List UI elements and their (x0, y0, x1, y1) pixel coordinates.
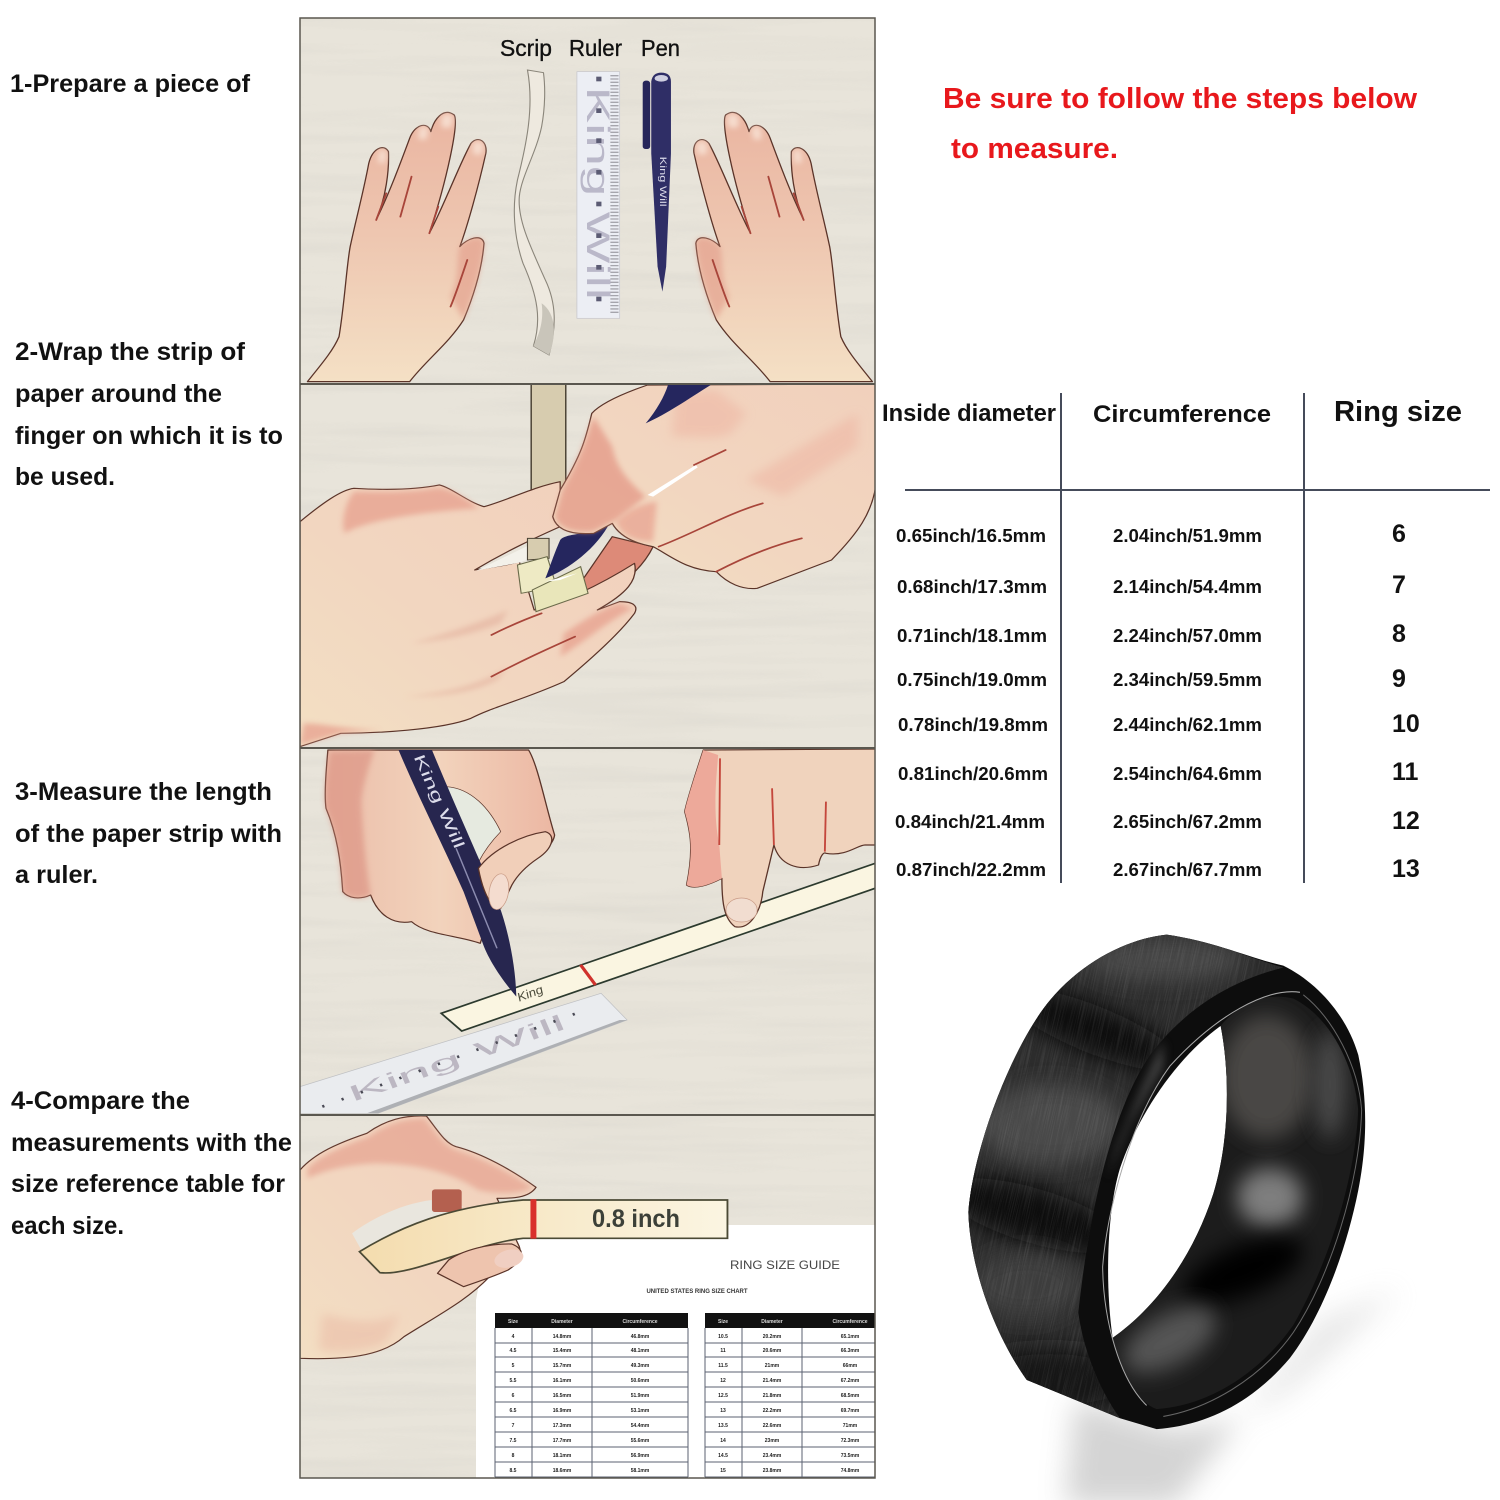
column: circumference: 2.14inch/54.4mm (1113, 577, 1262, 597)
size table right: 14 (720, 1438, 726, 1444)
size table left: 46.8mm (631, 1334, 650, 1340)
ruler (300, 993, 627, 1113)
size table left: 6 (512, 1393, 515, 1399)
column: ring size (1392, 520, 1420, 883)
size table right: 12 (720, 1378, 726, 1384)
size table right: 72.3mm (841, 1438, 860, 1444)
column headers: Circumference (1093, 401, 1271, 428)
column: circumference: 2.04inch/51.9mm (1113, 526, 1262, 546)
label: Scrip: Scrip (500, 35, 552, 61)
illustration strip background (300, 18, 875, 1478)
panel: wrapping the strip (300, 384, 882, 747)
size table right: 66mm (843, 1363, 858, 1369)
column: ring size: 9 (1392, 665, 1406, 693)
size table right: 20.6mm (763, 1348, 782, 1354)
label: Pen: Pen (641, 35, 680, 61)
size table left: 55.6mm (631, 1438, 650, 1444)
column: inside diameter: 0.87inch/22.2mm (896, 860, 1046, 880)
polished bevel highlight (1107, 1040, 1163, 1179)
step 3 text: 3-Measure the length (15, 778, 272, 806)
ring size guide sheet (476, 1225, 875, 1478)
size table right: 11 (720, 1348, 726, 1354)
panel: measuring the strip (300, 749, 882, 1113)
column: inside diameter: 0.68inch/17.3mm (897, 577, 1047, 597)
size table left: 58.1mm (631, 1468, 650, 1474)
column: inside diameter: 0.84inch/21.4mm (895, 812, 1045, 832)
size table (882, 393, 1490, 883)
size table left: 7.5 (510, 1438, 517, 1444)
column: ring size: 7 (1392, 571, 1406, 599)
size table right: 73.5mm (841, 1453, 860, 1459)
size table left: 8.5 (510, 1468, 517, 1474)
column headers: Ring size (1334, 396, 1462, 428)
step 4 text: 4-Compare the (11, 1087, 190, 1115)
size table left: 15.4mm (553, 1348, 572, 1354)
size table left: 53.1mm (631, 1408, 650, 1414)
size table left: Circumference (622, 1319, 658, 1325)
size table right: 15 (720, 1468, 726, 1474)
left hand with pen (325, 750, 555, 943)
column headers: Inside diameter (882, 400, 1056, 427)
thumb (438, 1244, 521, 1287)
paper strip (441, 862, 880, 1031)
right hand (685, 749, 882, 927)
icon: left hand (307, 112, 486, 382)
column: ring size: 10 (1392, 710, 1420, 738)
paper ring on finger (517, 557, 556, 593)
column: inside diameter: 0.65inch/16.5mm (896, 526, 1046, 546)
label: Ruler: Ruler (569, 35, 622, 61)
size table right: Circumference (832, 1319, 868, 1325)
column: ring size: 13 (1392, 855, 1420, 883)
rim highlight (1103, 992, 1300, 1405)
size table right: 67.2mm (841, 1378, 860, 1384)
step 4 text (11, 1087, 292, 1240)
step 2 text: finger on which it is to (15, 422, 283, 450)
size table left: 56.9mm (631, 1453, 650, 1459)
column: inside diameter (895, 526, 1048, 880)
step 2 text: 2-Wrap the strip of (15, 338, 246, 366)
size table right: 74.8mm (841, 1468, 860, 1474)
step 3 text: a ruler. (15, 861, 98, 889)
column: inside diameter: 0.75inch/19.0mm (897, 670, 1047, 690)
size table right: 66.3mm (841, 1348, 860, 1354)
size table left: 5 (512, 1363, 515, 1369)
gap between fingers (477, 546, 527, 571)
size table left: 8 (512, 1453, 515, 1459)
size table left: Size (508, 1319, 518, 1325)
gap in grip (352, 1200, 464, 1250)
column: circumference: 2.24inch/57.0mm (1113, 626, 1262, 646)
label: 0.8 inch: 0.8 inch (592, 1205, 680, 1233)
back finger of left hand (584, 536, 654, 589)
red instruction heading (943, 83, 1417, 165)
left hand (300, 482, 636, 747)
size table left: 4 (512, 1334, 515, 1340)
size table right: 13 (720, 1408, 726, 1414)
size table left: 15.7mm (553, 1363, 572, 1369)
size table right: 22.6mm (763, 1423, 782, 1429)
size table right: 71mm (843, 1423, 858, 1429)
icon: paper strip (514, 70, 554, 355)
step 4 text: each size. (11, 1212, 124, 1240)
size table left: 7 (512, 1423, 515, 1429)
size table left (495, 1313, 688, 1477)
column: circumference: 2.67inch/67.7mm (1113, 860, 1262, 880)
step 2 text: be used. (15, 463, 115, 491)
ring silhouette (968, 935, 1365, 1429)
size table right: Size (718, 1319, 728, 1325)
step 2 text: paper around the (15, 380, 222, 408)
paper strip (359, 1200, 727, 1273)
size table left: 18.6mm (553, 1468, 572, 1474)
thumb (478, 832, 552, 908)
panel: measuring the strip: King (515, 983, 545, 1004)
column: ring size: 11 (1392, 758, 1419, 786)
sheet title: RING SIZE GUIDE (730, 1260, 840, 1272)
step 1 text: 1-Prepare a piece of (10, 70, 251, 98)
size table left: 14.8mm (553, 1334, 572, 1340)
column headers (882, 396, 1462, 428)
column: inside diameter: 0.71inch/18.1mm (897, 626, 1047, 646)
pen (545, 526, 608, 578)
ring opening (1108, 1026, 1227, 1338)
size table right: 21.4mm (763, 1378, 782, 1384)
column: circumference: 2.54inch/64.6mm (1113, 764, 1262, 784)
panel: measuring the strip: King Will (344, 1010, 569, 1107)
size table left: 6.5 (510, 1408, 517, 1414)
step 4 text: measurements with the (11, 1129, 292, 1157)
column: inside diameter: 0.78inch/19.8mm (898, 715, 1048, 735)
size table right: Diameter (761, 1319, 783, 1325)
size table right: 20.2mm (763, 1334, 782, 1340)
ring shadow (1065, 1290, 1400, 1500)
size table right: 69.7mm (841, 1408, 860, 1414)
size table right: 65.1mm (841, 1334, 860, 1340)
size table left: 5.5 (510, 1378, 517, 1384)
brushed outer band (968, 934, 1283, 1418)
icon: pen (643, 73, 671, 292)
hand holding strip (300, 1116, 536, 1359)
size table left: 49.3mm (631, 1363, 650, 1369)
size table right: 21.8mm (763, 1393, 782, 1399)
size table right: 21mm (765, 1363, 780, 1369)
icon: ruler: King Will (580, 87, 614, 300)
paper strip going up (531, 384, 566, 493)
size table right: 10.5 (718, 1334, 728, 1340)
size table left: 16.5mm (553, 1393, 572, 1399)
size table left: 54.4mm (631, 1423, 650, 1429)
size table left: 17.7mm (553, 1438, 572, 1444)
step 4 text: size reference table for (11, 1170, 285, 1198)
icon: ruler (577, 72, 620, 318)
column: ring size: 6 (1392, 520, 1406, 548)
size table left: 51.9mm (631, 1393, 650, 1399)
column: circumference: 2.34inch/59.5mm (1113, 670, 1262, 690)
red instruction heading: Be sure to follow the steps below (943, 83, 1417, 115)
table grid (905, 393, 1490, 883)
column: ring size: 12 (1392, 807, 1420, 835)
column: ring size: 8 (1392, 620, 1406, 648)
panel: measuring the strip: King Will (409, 752, 467, 851)
size table left: 48.1mm (631, 1348, 650, 1354)
size table right: 14.5 (718, 1453, 728, 1459)
panel: materials (307, 35, 872, 382)
step 2 text (15, 338, 283, 491)
size table right: 68.5mm (841, 1393, 860, 1399)
size table left: 17.3mm (553, 1423, 572, 1429)
pen (399, 750, 516, 997)
size table left: Diameter (551, 1319, 573, 1325)
size table right: 13.5 (718, 1423, 728, 1429)
size table left: 18.1mm (553, 1453, 572, 1459)
size table left: 16.9mm (553, 1408, 572, 1414)
step 3 text: of the paper strip with (15, 820, 282, 848)
column: circumference: 2.65inch/67.2mm (1113, 812, 1262, 832)
size table right (705, 1313, 875, 1477)
size table right: 23.8mm (763, 1468, 782, 1474)
column: inside diameter: 0.81inch/20.6mm (898, 764, 1048, 784)
panel: comparing to size table (300, 1116, 875, 1478)
column: circumference (1113, 526, 1262, 880)
right hand (553, 384, 882, 589)
size table right: 12.5 (718, 1393, 728, 1399)
size table left: 4.5 (510, 1348, 517, 1354)
size table right: 23.4mm (763, 1453, 782, 1459)
size table left: 16.1mm (553, 1378, 572, 1384)
size table left: 50.6mm (631, 1378, 650, 1384)
sheet subtitle: UNITED STATES RING SIZE CHART (646, 1289, 748, 1295)
size table right: 22.2mm (763, 1408, 782, 1414)
photo: black ring (968, 934, 1366, 1430)
step 3 text (15, 778, 282, 889)
icon: pen: King Will (658, 157, 668, 207)
icon: right hand (694, 112, 872, 382)
red instruction heading: to measure. (951, 133, 1118, 165)
size table right: 11.5 (718, 1363, 728, 1369)
panel borders (300, 18, 875, 1478)
column: circumference: 2.44inch/62.1mm (1113, 715, 1262, 735)
size table right: 23mm (765, 1438, 780, 1444)
inner surface (1112, 996, 1358, 1409)
